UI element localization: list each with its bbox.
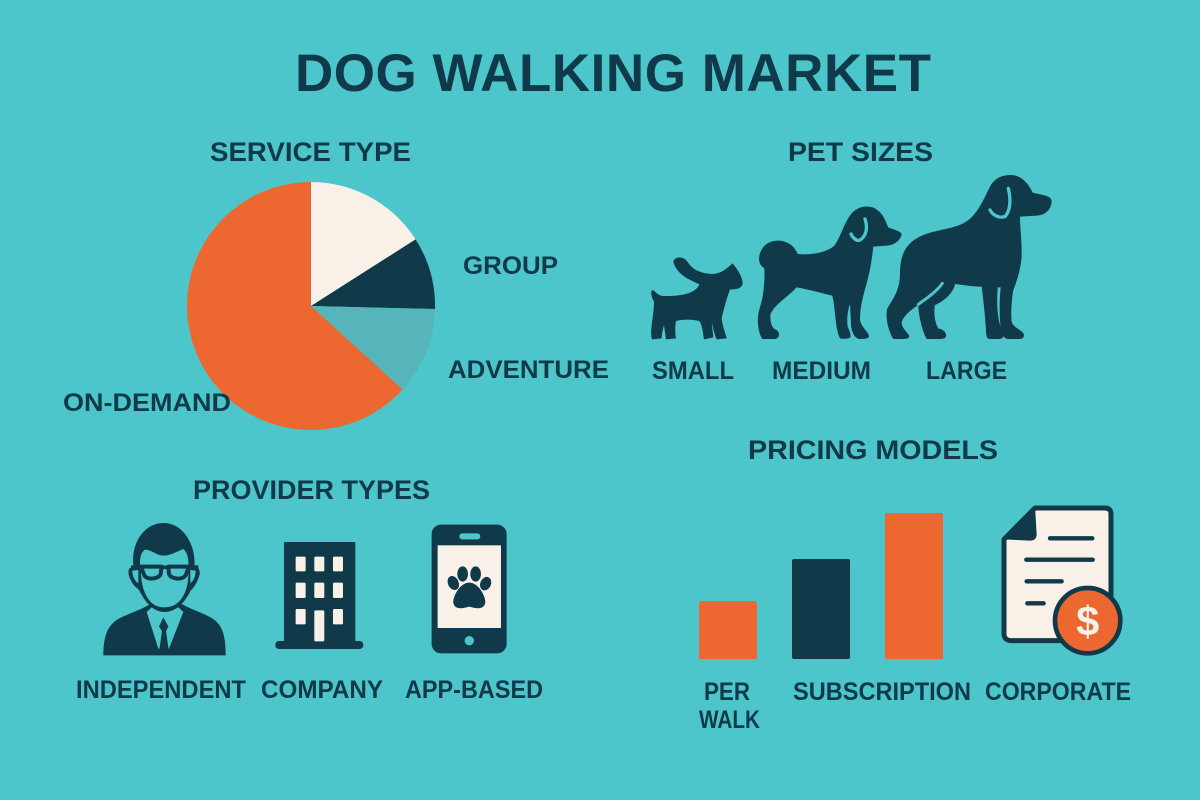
pie chart: [187, 182, 435, 430]
panel: pricing models: [699, 435, 1131, 734]
label: corporate: CORPORATE: [985, 678, 1131, 706]
panel: pet sizes: [651, 137, 1052, 385]
icon: corporate invoice: $: [1076, 597, 1099, 644]
icon: corporate invoice: [1003, 507, 1120, 653]
icon: medium dog: [758, 207, 902, 339]
heading: service type: SERVICE TYPE: [210, 137, 411, 167]
heading: pricing models: PRICING MODELS: [748, 435, 998, 465]
heading: provider types: PROVIDER TYPES: [193, 475, 430, 505]
label: small: SMALL: [652, 357, 734, 385]
label: large: LARGE: [926, 357, 1007, 385]
panel: service type: [63, 137, 609, 430]
icon: company building: [275, 542, 363, 649]
icon: small dog: [651, 257, 743, 339]
label: medium: MEDIUM: [772, 357, 871, 385]
label: group: GROUP: [463, 252, 558, 280]
icon: independent person: [103, 523, 226, 655]
label: app-based: APP-BASED: [405, 676, 543, 704]
label: company: COMPANY: [261, 676, 383, 704]
label: subscription: SUBSCRIPTION: [793, 678, 971, 706]
label: per walk: [699, 678, 760, 734]
bar chart: [699, 513, 943, 659]
label: adventure: ADVENTURE: [448, 356, 609, 384]
icon: phone with paw: [432, 525, 507, 653]
label: independent: INDEPENDENT: [76, 676, 246, 704]
label: per walk: PER: [704, 678, 750, 706]
panel: provider types: [76, 475, 543, 704]
icon: large dog: [887, 175, 1052, 339]
heading: pet sizes: PET SIZES: [788, 137, 933, 167]
label: on-demand: ON-DEMAND: [63, 389, 231, 417]
label: per walk: WALK: [699, 706, 760, 734]
title: DOG WALKING MARKET: [295, 44, 931, 103]
